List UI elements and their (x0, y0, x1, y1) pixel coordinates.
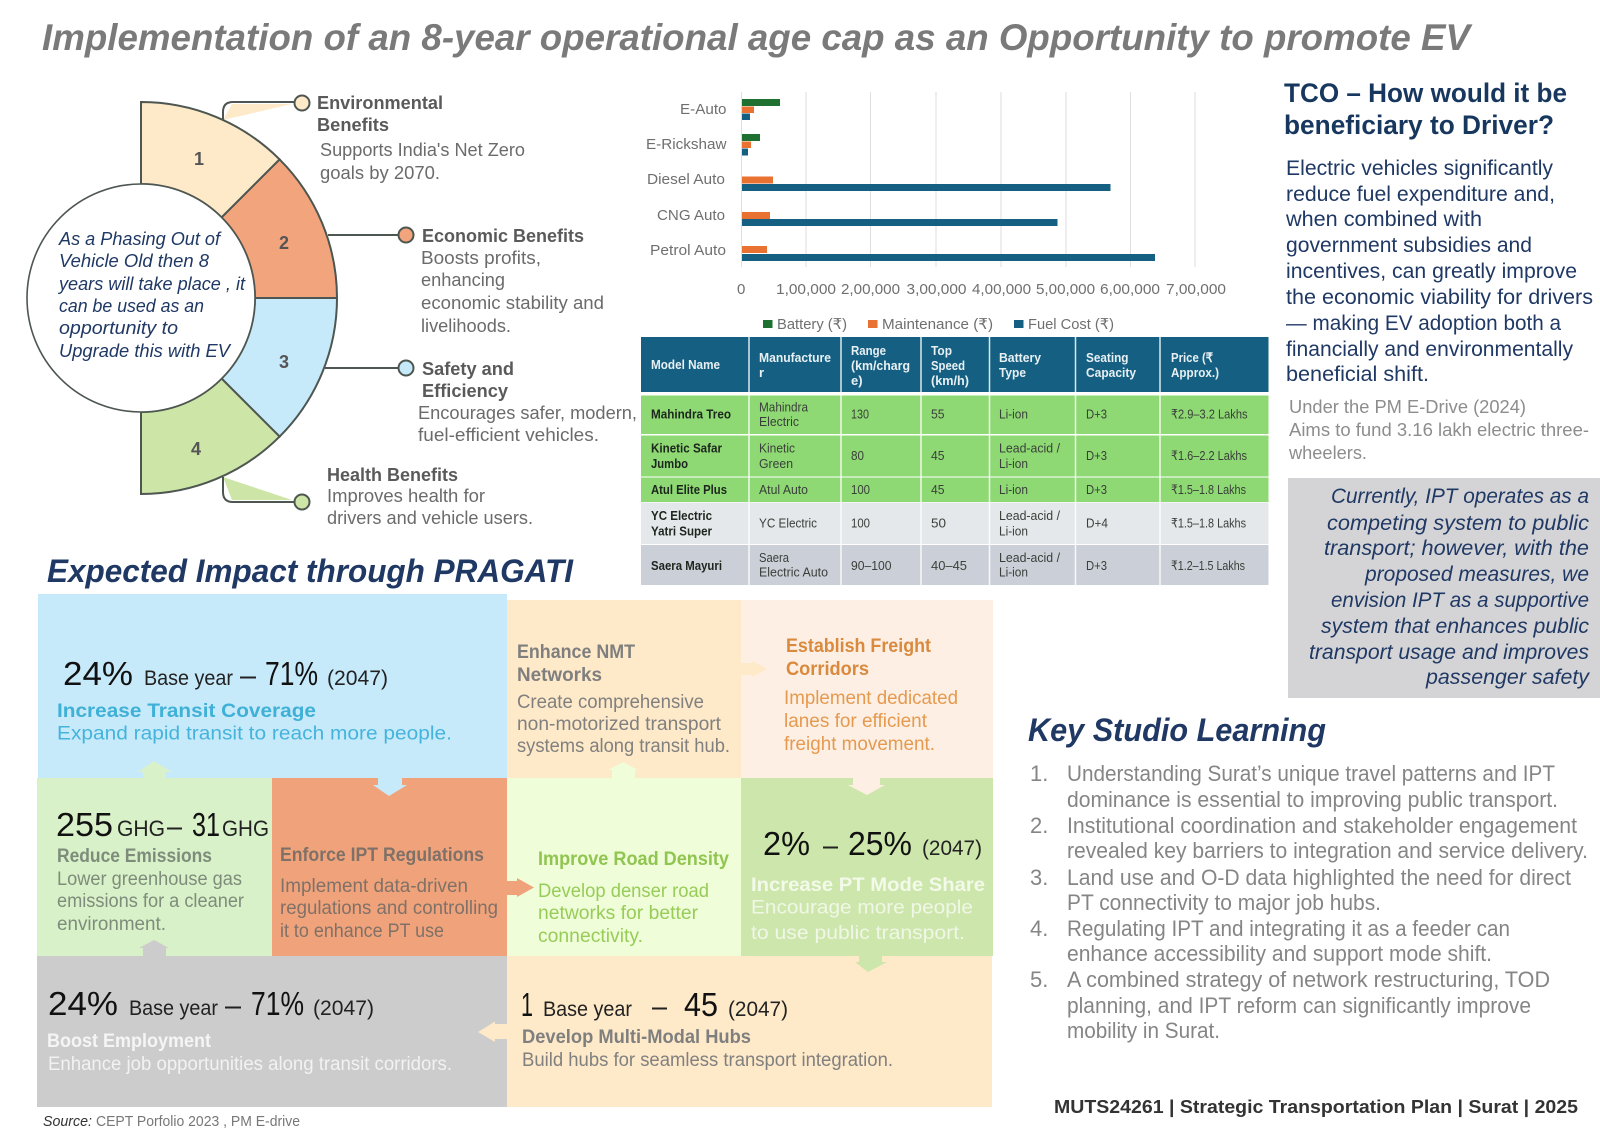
panel: increase transit coverage: Expand rapid transit to reach more people. (57, 724, 452, 744)
callout: IPT vision: transport usage and improves (1309, 641, 1589, 664)
list: key studio learning: Regulating IPT and integrating it as a feeder can (1067, 916, 1510, 941)
row: Mahindra Treo: 55 (931, 406, 944, 422)
callout: IPT vision: envision IPT as a supportive (1331, 589, 1589, 612)
row: Saera Mayuri: Saera Mayuri (651, 558, 722, 573)
ring segment 4 (141, 379, 280, 494)
row: Mahindra Treo (641, 396, 1268, 434)
panel: improve road density: networks for better (538, 903, 699, 924)
row: Saera Mayuri: Lead-acid / (999, 550, 1060, 565)
row: Saera Mayuri: Electric Auto (759, 564, 828, 580)
panel: increase PT mode share: 25% (848, 825, 912, 862)
panel: boost employment: 71% (251, 985, 304, 1022)
arrow: emissions to coverage (138, 761, 172, 778)
segment numbers: 2 (279, 233, 289, 253)
text: TCO explanation (1285, 157, 1593, 386)
panel: enforce IPT regulations: it to enhance PT use (280, 921, 444, 942)
connector: safety (325, 367, 399, 369)
table header: Range (851, 343, 886, 358)
text: economic benefits: economic stability and (421, 293, 604, 313)
table header: Top (931, 343, 952, 358)
row: Mahindra Treo: 130 (851, 406, 869, 422)
text: health benefits: Improves health for (327, 486, 485, 506)
legend: Fuel Cost (₹) (1028, 316, 1114, 333)
list: key studio learning: mobility in Surat. (1067, 1018, 1220, 1043)
panel: develop multi-modal hubs: (2047) (728, 998, 788, 1021)
row: Mahindra Treo: ₹2.9–3.2 Lakhs (1171, 406, 1248, 422)
table header: Capacity (1086, 365, 1137, 380)
panel: enforce IPT regulations (272, 778, 507, 956)
panel: enhance NMT networks: Create comprehensive (517, 692, 704, 713)
arrow: PT mode share to hubs (855, 956, 887, 972)
panel: improve road density (507, 778, 741, 956)
panel: establish freight corridors: Corridors (786, 659, 869, 680)
row: YC Electric Yatri Super: Lead-acid / (999, 508, 1060, 523)
list: key studio learning: Land use and O-D data highlighted the need for direct (1067, 865, 1571, 890)
panel: boost employment (37, 956, 507, 1107)
row: YC Electric Yatri Super: D+4 (1086, 516, 1108, 530)
table header: (km/charg (851, 358, 910, 373)
text: safety and efficiency: fuel-efficient vehicles. (418, 425, 599, 445)
heading: TCO: beneficiary to Driver? (1284, 110, 1554, 140)
panel: enforce IPT regulations: Implement data-driven (280, 876, 468, 897)
text: safety and efficiency: Encourages safer, modern, (418, 403, 637, 423)
row: Atul Elite Plus: 45 (931, 482, 944, 497)
panel: boost employment: Enhance job opportunities along transit corridors. (48, 1054, 452, 1075)
panel: enhance NMT networks: non-motorized transport (517, 714, 722, 735)
panel: increase transit coverage: – (240, 659, 256, 692)
panel: reduce emissions: 31 (192, 806, 220, 843)
row: Kinetic Safar Jumbo: Green (759, 456, 793, 471)
connector: economic (328, 234, 399, 236)
value axis labels: 5,00,000 (1036, 281, 1095, 298)
text: environmental benefits: Environmental (317, 93, 443, 113)
panel: establish freight corridors: Implement dedicated (784, 688, 958, 709)
heading: expected impact: Expected Impact through PRAGATI (47, 553, 574, 589)
connector: health (223, 477, 294, 502)
row: Kinetic Safar Jumbo: Kinetic (759, 440, 795, 456)
row: Atul Elite Plus: Atul Auto (759, 482, 808, 497)
panel: boost employment: Base year (129, 997, 218, 1020)
table header: r (759, 365, 764, 380)
arrow: NMT to freight (741, 661, 767, 677)
row: Saera Mayuri: Li-ion (999, 564, 1028, 580)
panel: increase PT mode share: 2% (763, 825, 810, 862)
panel: improve road density: Develop denser road (538, 881, 709, 902)
centre circle: can be used as an (59, 296, 204, 316)
panel: increase PT mode share: – (823, 829, 838, 862)
table header: (km/h) (931, 373, 969, 388)
panel: reduce emissions: – (167, 810, 182, 843)
panel: reduce emissions (37, 778, 272, 956)
list: key studio learning: Understanding Surat’s unique travel patterns and IPT (1067, 761, 1555, 786)
row: Atul Elite Plus: ₹1.5–1.8 Lakhs (1171, 482, 1246, 497)
row: Kinetic Safar Jumbo: 45 (931, 448, 944, 463)
callout: IPT vision: system that enhances public (1321, 615, 1590, 638)
panel: develop multi-modal hubs (507, 956, 992, 1107)
segment numbers: 4 (191, 439, 201, 459)
text: safety and efficiency: Efficiency (422, 381, 508, 401)
text: PM E-Drive note: Under the PM E-Drive (2024) (1289, 397, 1526, 417)
list: key studio learning: 2. (1030, 813, 1048, 838)
value axis labels: 6,00,000 (1100, 281, 1160, 298)
category labels (646, 101, 727, 259)
panel: increase transit coverage (38, 594, 507, 778)
table header: e) (851, 373, 863, 388)
table header: Speed (931, 358, 965, 373)
arrow: employment to emissions (139, 940, 169, 956)
panel: enhance NMT networks: systems along transit hub. (517, 736, 730, 757)
text: safety and efficiency: Safety and (422, 359, 514, 379)
text: TCO explanation: Electric vehicles significantly (1286, 157, 1553, 180)
text: TCO explanation: financially and environmentally (1286, 338, 1573, 361)
panel: increase transit coverage: Base year (144, 667, 233, 690)
panel: enforce IPT regulations: regulations and controlling (280, 898, 498, 919)
row: Atul Elite Plus: D+3 (1086, 482, 1107, 497)
text: health benefits (327, 465, 533, 528)
callout: IPT vision: competing system to public (1327, 512, 1590, 535)
category labels: E-Rickshaw (646, 136, 727, 153)
text: TCO explanation: beneficial shift. (1286, 363, 1429, 386)
list: key studio learning: revealed key barriers to integration and service delivery. (1067, 838, 1588, 863)
ring segment 1 (141, 102, 280, 217)
panel: develop multi-modal hubs: 1 (521, 986, 533, 1023)
table header: Approx.) (1171, 365, 1219, 380)
panel: boost employment: – (225, 989, 241, 1022)
panel: enhance NMT networks: Enhance NMT (517, 642, 635, 663)
row: Saera Mayuri: ₹1.2–1.5 Lakhs (1171, 558, 1245, 573)
panel: increase PT mode share: Increase PT Mode Share (751, 875, 985, 896)
text: environmental benefits: Benefits (317, 115, 389, 135)
ring segment 2 (222, 159, 337, 298)
centre circle (27, 184, 255, 412)
callout: IPT vision: passenger safety (1425, 666, 1591, 689)
panel: develop multi-modal hubs: 45 (684, 986, 718, 1023)
row: YC Electric Yatri Super: Li-ion (999, 524, 1028, 538)
text: environmental benefits: Supports India's Net Zero (320, 140, 525, 160)
text: health benefits: drivers and vehicle users. (327, 508, 533, 528)
row: Mahindra Treo: Mahindra Treo (651, 406, 731, 422)
row: Atul Elite Plus: Li-ion (999, 482, 1028, 497)
bars: Petrol Auto (742, 246, 1155, 261)
panel: benefits half-ring diagram (27, 96, 414, 510)
panel: establish freight corridors: freight movement. (784, 734, 935, 755)
text: TCO explanation: — making EV adoption both a (1286, 312, 1561, 335)
row: YC Electric Yatri Super: 100 (851, 516, 870, 530)
row: Saera Mayuri: 90–100 (851, 558, 892, 573)
heading: TCO (1284, 78, 1567, 140)
panel: reduce emissions: environment. (57, 914, 166, 935)
table header: Model Name (651, 357, 720, 372)
centre circle: Vehicle Old then 8 (59, 251, 209, 271)
row: Saera Mayuri: D+3 (1086, 558, 1107, 573)
panel: reduce emissions: GHG (117, 816, 165, 841)
row: Mahindra Treo: D+3 (1086, 406, 1107, 422)
panel: boost employment: Boost Employment (47, 1031, 212, 1052)
callout: IPT vision: Currently, IPT operates as a (1331, 485, 1589, 508)
table header: Battery (999, 350, 1042, 365)
value axis labels (737, 281, 1226, 298)
callout: IPT vision (1288, 478, 1600, 698)
row: Kinetic Safar Jumbo: Kinetic Safar (651, 440, 722, 456)
footer credit: MUTS24261 | Strategic Transportation Plan | Surat | 2025 (1054, 1096, 1578, 1117)
row: YC Electric Yatri Super: YC Electric (759, 516, 817, 530)
list: key studio learning: planning, and IPT reform can significantly improve (1067, 993, 1531, 1018)
text: economic benefits: Economic Benefits (422, 226, 584, 246)
panel: develop multi-modal hubs: Build hubs for seamless transport integration. (522, 1050, 893, 1071)
row: Kinetic Safar Jumbo: Jumbo (651, 456, 688, 471)
list: key studio learning: 5. (1030, 967, 1048, 992)
ring segment 3 (222, 298, 337, 437)
row: Atul Elite Plus (641, 478, 1268, 502)
row: YC Electric Yatri Super: 50 (931, 516, 946, 530)
text: economic benefits: livelihoods. (421, 316, 511, 336)
row: Mahindra Treo: Li-ion (999, 406, 1028, 422)
list: key studio learning: 3. (1030, 865, 1048, 890)
value axis labels: 4,00,000 (972, 281, 1031, 298)
text: PM E-Drive note: Aims to fund 3.16 lakh electric three- (1289, 420, 1589, 440)
centre circle: opportunity to (59, 318, 178, 338)
value axis labels: 3,00,000 (906, 281, 966, 298)
list: key studio learning: Institutional coordination and stakeholder engagement (1067, 813, 1577, 838)
panel: improve road density: Improve Road Density (538, 849, 729, 870)
row: Atul Elite Plus: 100 (851, 482, 870, 497)
text: TCO explanation: reduce fuel expenditure and, (1286, 183, 1555, 206)
list: key studio learning: dominance is essential to improving public transport. (1067, 787, 1558, 812)
panel: enforce IPT regulations: Enforce IPT Regulations (280, 845, 484, 866)
bars: E-Auto (742, 99, 780, 120)
table header: Manufacture (759, 350, 831, 365)
bars: E-Rickshaw (742, 134, 760, 156)
row: Kinetic Safar Jumbo: Li-ion (999, 456, 1028, 471)
value axis labels: 0 (737, 281, 745, 298)
row: YC Electric Yatri Super: ₹1.5–1.8 Lakhs (1171, 516, 1246, 530)
panel: establish freight corridors: Establish Freight (786, 636, 932, 657)
bars: Diesel Auto (742, 176, 1110, 191)
text: PM E-Drive note (1288, 397, 1589, 463)
table header: Seating (1086, 350, 1129, 365)
arrow: IPT regulations to road density (507, 878, 534, 897)
panel: boost employment: 24% (48, 985, 118, 1022)
panel: reduce emissions: 255 (56, 806, 113, 843)
text: TCO explanation: the economic viability for drivers (1286, 286, 1593, 309)
panel: reduce emissions: GHG (222, 816, 269, 841)
panel: enhance NMT networks (507, 600, 741, 778)
panel: increase PT mode share: (2047) (922, 837, 982, 860)
row: YC Electric Yatri Super (641, 502, 1268, 544)
row: Kinetic Safar Jumbo: 80 (851, 448, 864, 463)
connector: environmental (223, 102, 294, 120)
text: PM E-Drive note: wheelers. (1288, 443, 1367, 463)
segment numbers: 1 (194, 149, 204, 169)
row: YC Electric Yatri Super: Yatri Super (651, 524, 712, 538)
panel: reduce emissions: emissions for a cleaner (57, 891, 245, 912)
panel: improve road density: connectivity. (538, 926, 643, 947)
bar chart: total cost of ownership (646, 92, 1226, 333)
callout: IPT vision: transport; however, with the (1324, 537, 1589, 560)
row: Saera Mayuri (641, 545, 1268, 585)
legend (763, 316, 1114, 333)
arrow: road density to NMT (608, 762, 638, 778)
centre circle: As a Phasing Out of (58, 229, 222, 249)
category labels: CNG Auto (657, 207, 725, 224)
panel: increase PT mode share: Encourage more people (751, 898, 973, 918)
node markers (294, 96, 414, 510)
panel grid: expected impact (37, 594, 993, 1107)
row: Mahindra Treo: Mahindra (759, 400, 809, 414)
text: economic benefits: Boosts profits, (421, 248, 541, 268)
segment numbers: 3 (279, 352, 289, 372)
panel: increase transit coverage: 71% (265, 655, 318, 692)
source note: Source: (43, 1113, 92, 1130)
text: environmental benefits (317, 93, 525, 183)
text: TCO explanation: incentives, can greatly improve (1286, 260, 1577, 283)
panel: increase transit coverage: (2047) (327, 667, 388, 690)
centre circle: Upgrade this with EV (59, 341, 232, 361)
panel: establish freight corridors (741, 600, 993, 778)
category labels: Diesel Auto (647, 171, 725, 188)
centre circle: years will take place , it (57, 274, 246, 294)
row: Atul Elite Plus: Atul Elite Plus (651, 482, 727, 497)
title: Implementation of an 8-year operational age cap as an Opportunity to promote EV (42, 17, 1473, 58)
arrow: hubs to employment (478, 1022, 507, 1042)
panel: establish freight corridors: lanes for efficient (784, 711, 928, 732)
table header (641, 337, 1268, 392)
text: economic benefits (421, 226, 604, 336)
panel: increase PT mode share (741, 778, 993, 956)
legend: Battery (₹) (777, 316, 847, 333)
panel: boost employment: (2047) (313, 997, 374, 1020)
value axis labels: 7,00,000 (1166, 281, 1226, 298)
panel: reduce emissions: Lower greenhouse gas (57, 869, 242, 890)
list: key studio learning: A combined strategy of network restructuring, TOD (1067, 967, 1550, 992)
segment numbers (191, 149, 289, 459)
value axis labels: 2,00,000 (841, 281, 900, 298)
row: YC Electric Yatri Super: YC Electric (651, 508, 712, 523)
panel: increase PT mode share: to use public transport. (751, 923, 965, 944)
arrow: freight to PT mode share (848, 778, 885, 795)
row: Mahindra Treo: Electric (759, 414, 799, 429)
panel: enhance NMT networks: Networks (517, 665, 602, 686)
panel: develop multi-modal hubs: Develop Multi-Modal Hubs (522, 1027, 751, 1048)
row: Kinetic Safar Jumbo: ₹1.6–2.2 Lakhs (1171, 448, 1247, 463)
category labels: Petrol Auto (650, 242, 726, 259)
text: environmental benefits: goals by 2070. (320, 163, 440, 183)
text: TCO explanation: government subsidies and (1286, 234, 1532, 257)
list: key studio learning: enhance accessibility and support mode shift. (1067, 941, 1492, 966)
table: electric three-wheeler models (641, 337, 1268, 585)
list: key studio learning: 1. (1030, 761, 1048, 786)
row: Kinetic Safar Jumbo: Lead-acid / (999, 440, 1060, 456)
panel: develop multi-modal hubs: Base year (543, 998, 632, 1021)
panel: increase transit coverage: 24% (63, 655, 133, 692)
row: Kinetic Safar Jumbo: D+3 (1086, 448, 1107, 463)
row: Kinetic Safar Jumbo (641, 436, 1268, 476)
panel: develop multi-modal hubs: – (652, 990, 667, 1023)
list: key studio learning: 4. (1030, 916, 1048, 941)
text: TCO explanation: when combined with (1285, 208, 1482, 231)
source note: CEPT Porfolio 2023 , PM E-drive (96, 1113, 300, 1130)
category labels: E-Auto (680, 101, 726, 118)
table header: Price (₹ (1171, 350, 1214, 365)
arrow: coverage to IPT regulations (373, 778, 407, 796)
text: safety and efficiency (418, 359, 637, 445)
panel: increase transit coverage: Increase Transit Coverage (57, 701, 316, 722)
panel: reduce emissions: Reduce Emissions (57, 846, 212, 867)
legend: Maintenance (₹) (882, 316, 993, 333)
table header: Type (999, 365, 1026, 380)
callout: IPT vision: proposed measures, we (1364, 563, 1589, 586)
row: Saera Mayuri: 40–45 (931, 558, 967, 573)
value axis labels: 1,00,000 (776, 281, 836, 298)
list: key studio learning (1030, 761, 1588, 1043)
row: Saera Mayuri: Saera (759, 550, 790, 565)
bars: CNG Auto (742, 212, 1058, 226)
list: key studio learning: PT connectivity to major job hubs. (1067, 890, 1381, 915)
text: health benefits: Health Benefits (327, 465, 458, 485)
heading: TCO: TCO – How would it be (1284, 78, 1567, 108)
heading: key studio learning: Key Studio Learning (1028, 712, 1326, 748)
text: economic benefits: enhancing (421, 270, 505, 290)
